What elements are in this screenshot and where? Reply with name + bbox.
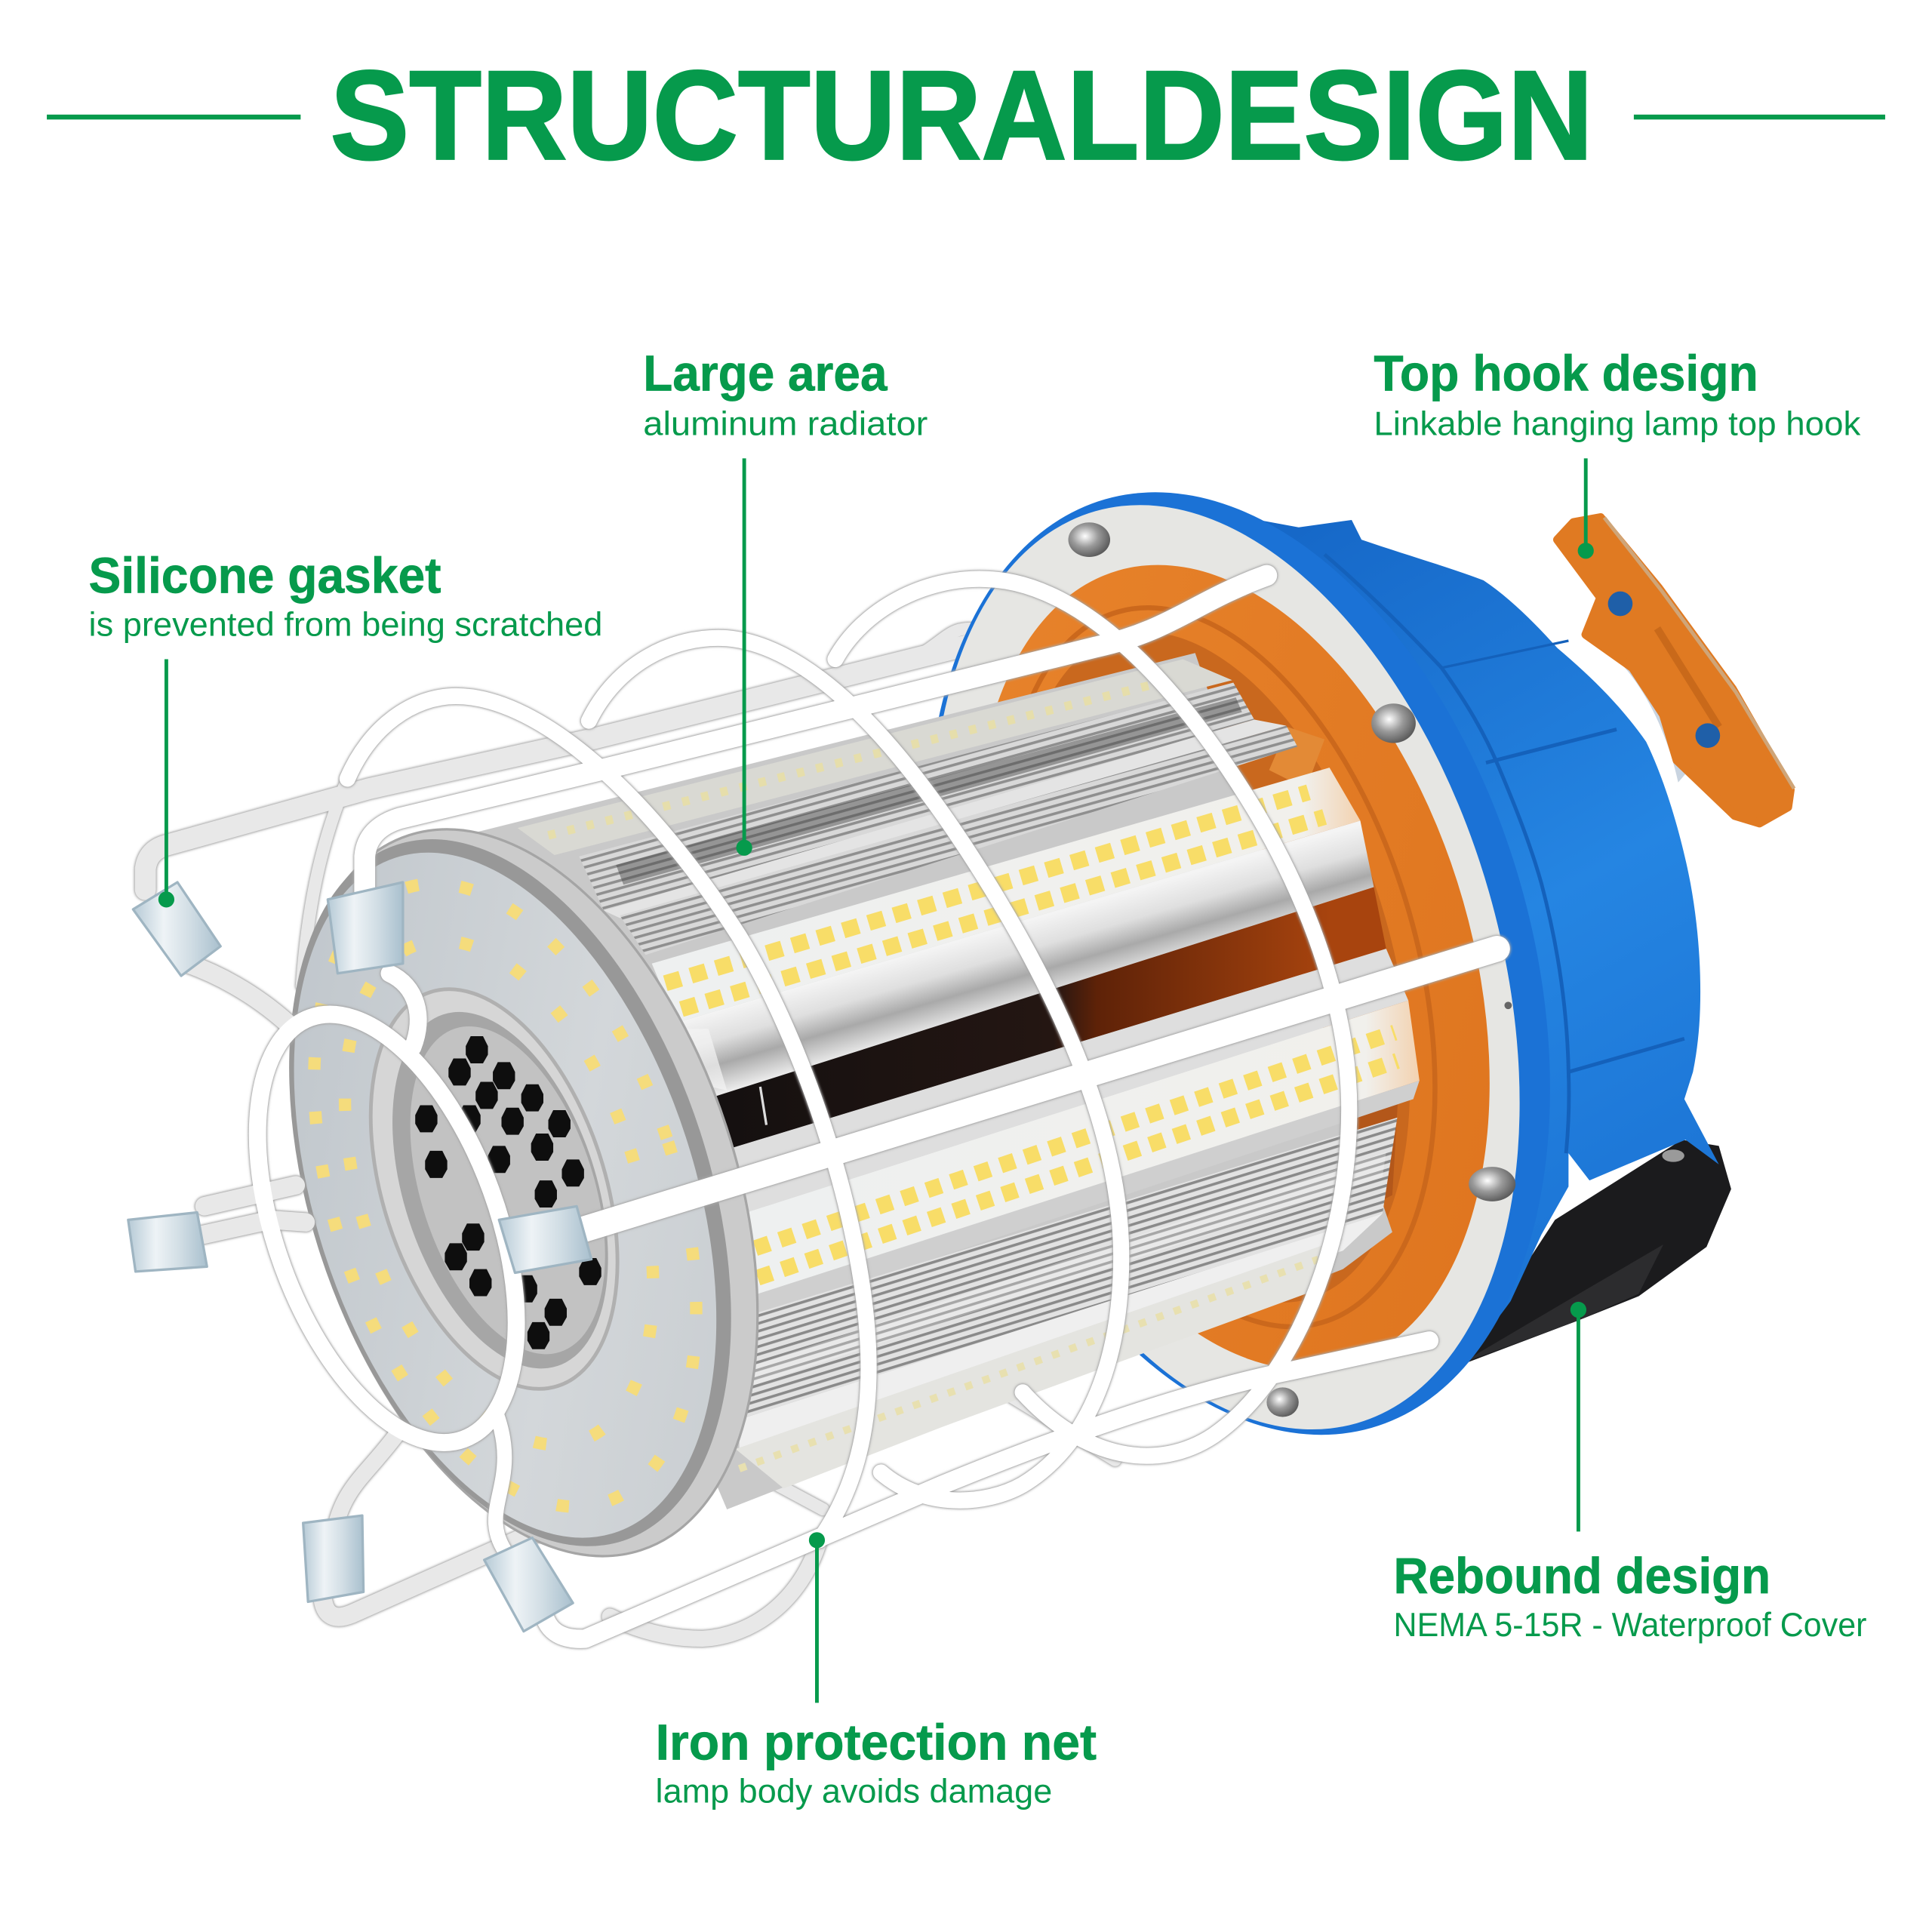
rear wire cage — [146, 629, 1115, 1638]
title: structural design: STRUCTURALDESIGN — [331, 45, 1593, 186]
front disc with ring of LEDs — [208, 770, 842, 1616]
callout: rebound design: Rebound design — [1394, 1548, 1770, 1604]
callout: top hook design: Linkable hanging lamp top hook — [1374, 405, 1861, 442]
hex vent holes — [415, 1036, 601, 1349]
callout: large area — [643, 346, 928, 856]
LED strips — [666, 792, 1397, 1278]
white flange and orange ring — [832, 436, 1620, 1499]
aluminum radiator body — [444, 653, 1420, 1509]
callout: silicone gasket — [89, 547, 602, 907]
hanging hook — [1558, 518, 1794, 823]
callout: iron protection net: Iron protection net — [656, 1714, 1097, 1770]
callout: large area: Large area — [643, 346, 888, 402]
callout: silicone gasket: is prevented from being scratched — [89, 606, 602, 643]
flange bolts — [1069, 522, 1515, 1417]
lamp illustration — [128, 418, 1794, 1639]
callout: top hook design: Top hook design — [1374, 346, 1758, 402]
callout: top hook design — [1374, 346, 1861, 558]
silicone gasket caps — [128, 882, 592, 1632]
callout: large area: aluminum radiator — [643, 405, 928, 442]
black rebound cover — [1460, 1140, 1731, 1365]
front wire cage — [181, 575, 1497, 1639]
callout: rebound design: NEMA 5-15R - Waterproof Cover — [1394, 1607, 1866, 1644]
blue housing — [823, 418, 1719, 1509]
callout: silicone gasket: Silicone gasket — [89, 547, 441, 604]
callout: iron protection net — [656, 1532, 1097, 1810]
callout: iron protection net: lamp body avoids damage — [656, 1774, 1052, 1810]
callout: rebound design — [1394, 1302, 1866, 1644]
